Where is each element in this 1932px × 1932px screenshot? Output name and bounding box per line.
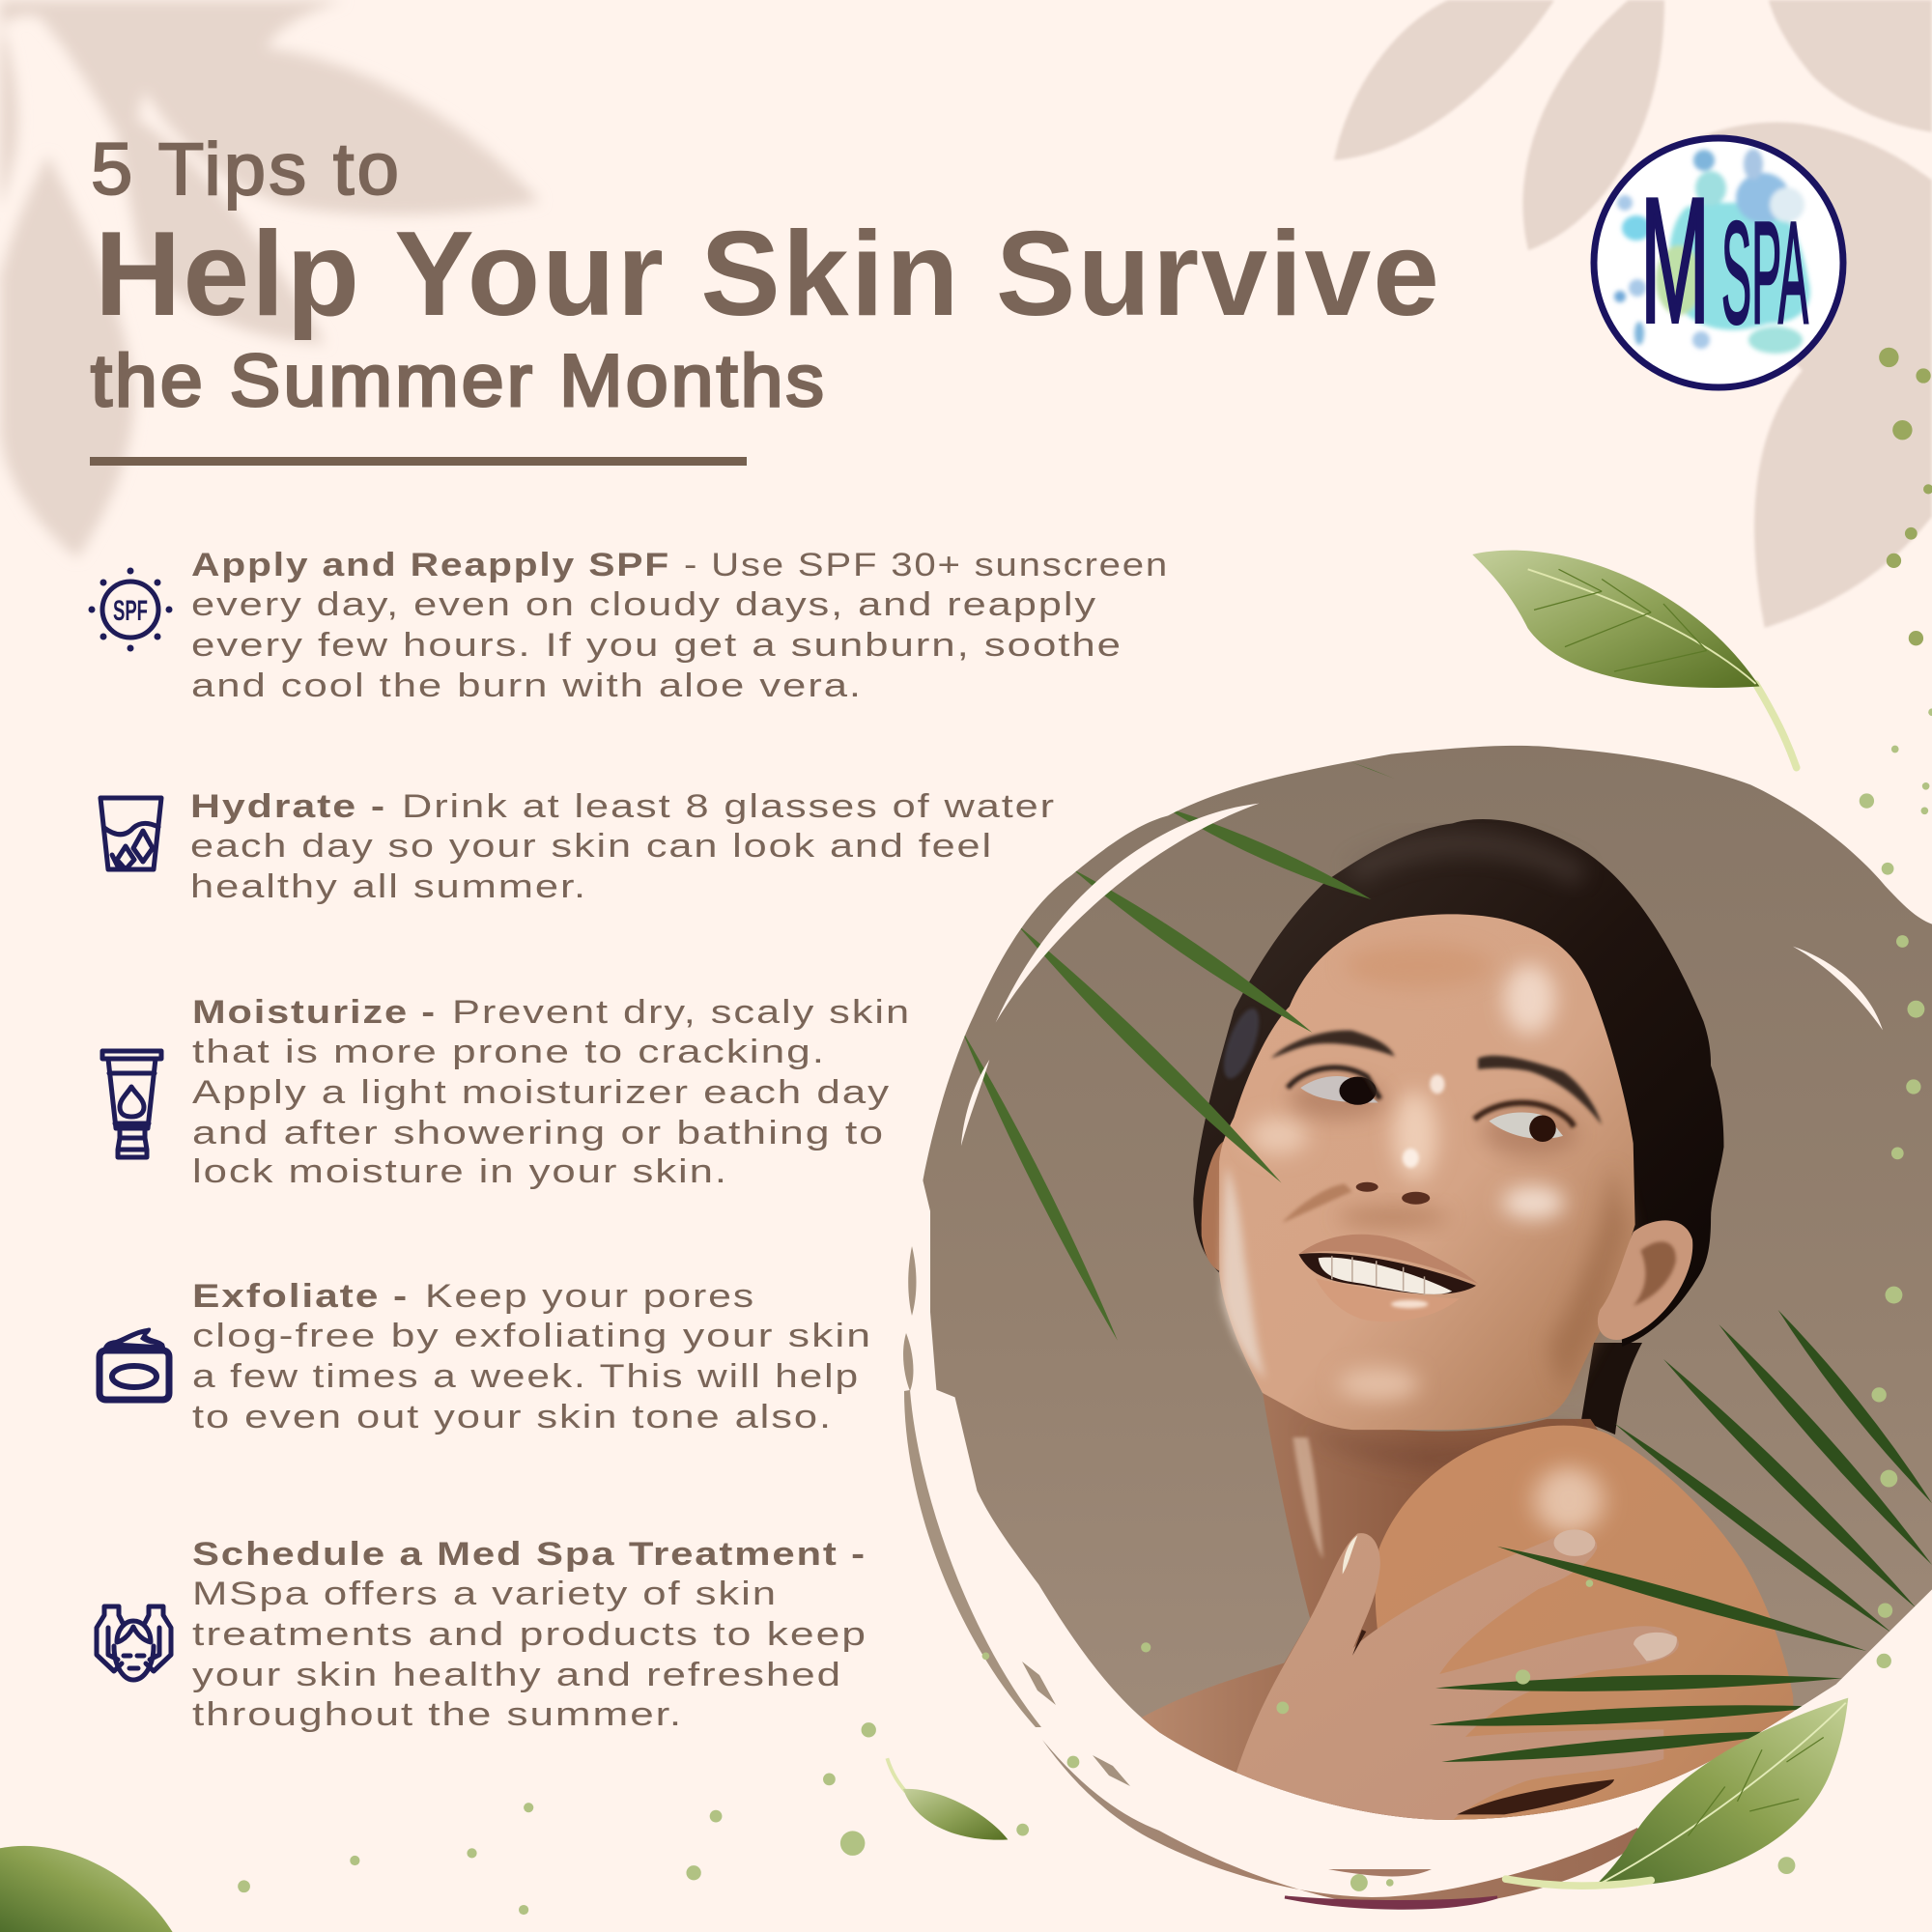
right ear xyxy=(1598,1220,1692,1340)
text: Moisturize tip: and after showering or bathing to xyxy=(192,1115,885,1151)
photo: woman with palm fronds xyxy=(923,746,1932,1820)
text: Moisturize tip: lock moisture in your skin. xyxy=(192,1153,728,1190)
text: Med Spa tip: your skin healthy and refreshed xyxy=(192,1657,842,1693)
nose xyxy=(1356,1182,1378,1192)
text: SPF tip: - Use SPF 30+ sunscreen xyxy=(684,547,1169,583)
logo: MSpa xyxy=(1593,137,1844,388)
title underline xyxy=(90,457,747,466)
mouth xyxy=(1298,1253,1476,1294)
text: Moisturize tip: Apply a light moisturizer each day xyxy=(192,1074,891,1111)
tip 1: SPF xyxy=(89,547,1169,704)
text: Moisturize tip: that is more prone to cracking. xyxy=(192,1034,826,1070)
text: Exfoliate tip: Exfoliate - xyxy=(192,1278,409,1315)
left ear xyxy=(1202,1142,1223,1271)
hand xyxy=(1219,1533,1679,1833)
title: Help Your Skin Survive: Help Your Skin Survive xyxy=(95,208,1441,341)
head xyxy=(1193,819,1723,1430)
icon: facial massage xyxy=(97,1606,171,1680)
eyebrows xyxy=(1271,1031,1395,1059)
text: Med Spa tip: Schedule a Med Spa Treatment - xyxy=(192,1536,867,1573)
text: Hydrate tip: healthy all summer. xyxy=(190,868,587,905)
text: Hydrate tip: Drink at least 8 glasses of water xyxy=(402,788,1056,825)
scattered green dots xyxy=(238,348,1932,1915)
text: SPF tip: every few hours. If you get a sunburn, soothe xyxy=(191,627,1122,664)
text: Moisturize tip xyxy=(192,994,911,1190)
text: Med Spa tip: throughout the summer. xyxy=(192,1696,683,1733)
tip 2: Hydrate xyxy=(100,788,1056,905)
text: Exfoliate tip: to even out your skin tone also. xyxy=(192,1399,833,1435)
text: Med Spa tip xyxy=(192,1536,867,1733)
text: Moisturize tip: Moisturize - xyxy=(192,994,437,1031)
leaf: bottom left xyxy=(0,1846,173,1932)
background blurred leaves top-left xyxy=(0,0,540,558)
icon: SPF sun xyxy=(89,568,172,651)
palm fronds lower right xyxy=(1430,1310,1932,1762)
tip 3: Moisturize xyxy=(102,994,911,1190)
face xyxy=(1219,914,1635,1430)
leaf: small bottom xyxy=(887,1758,1008,1840)
text: Exfoliate tip: Keep your pores xyxy=(425,1278,755,1315)
text: Hydrate tip xyxy=(190,788,1056,905)
text: SPF tip: Apply and Reapply SPF xyxy=(191,547,670,583)
text: SPF tip xyxy=(191,547,1169,704)
icon: glass of water xyxy=(100,798,161,869)
logo: MSpa: M xyxy=(1640,160,1710,359)
title: the Summer Months: the Summer Months xyxy=(91,340,827,422)
text: Hydrate tip: each day so your skin can look and feel xyxy=(190,828,993,865)
text: SPF tip: every day, even on cloudy days, and reapply xyxy=(191,586,1097,623)
text: Med Spa tip: MSpa offers a variety of skin xyxy=(192,1576,778,1612)
palm fronds upper left xyxy=(961,761,1395,1341)
icon: cream tube xyxy=(102,1051,161,1157)
leaf: bottom right xyxy=(1506,1698,1848,1886)
icon: cream jar xyxy=(99,1328,169,1400)
hair xyxy=(1193,819,1723,1347)
back hair behind neck xyxy=(1581,1343,1642,1435)
hand crease and nails xyxy=(1457,1779,1614,1814)
icon: SPF sun: SPF xyxy=(113,595,148,627)
eyes xyxy=(1300,1076,1378,1102)
text: Med Spa tip: treatments and products to keep xyxy=(192,1616,867,1653)
leaf: top right xyxy=(1472,551,1797,768)
text: SPF tip: and cool the burn with aloe vera. xyxy=(191,668,863,704)
text: Exfoliate tip: a few times a week. This will help xyxy=(192,1358,860,1395)
text: Hydrate tip: Hydrate - xyxy=(190,788,386,825)
neck, chest and shoulder xyxy=(1142,1393,1793,1820)
title: 5 Tips to: 5 Tips to xyxy=(91,128,402,211)
background blurred leaves top-right xyxy=(1334,0,1932,628)
facial shading and highlights xyxy=(1504,964,1555,1035)
tip 4: Exfoliate xyxy=(99,1278,872,1435)
tip 5: Med Spa xyxy=(97,1536,867,1733)
brush ring strokes xyxy=(903,1246,1642,1908)
text: Moisturize tip: Prevent dry, scaly skin xyxy=(452,994,911,1031)
text: Exfoliate tip: clog-free by exfoliating your skin xyxy=(192,1318,872,1354)
white brush cuts xyxy=(961,804,1883,1146)
text: Exfoliate tip xyxy=(192,1278,872,1435)
hair sheen xyxy=(1352,843,1581,877)
